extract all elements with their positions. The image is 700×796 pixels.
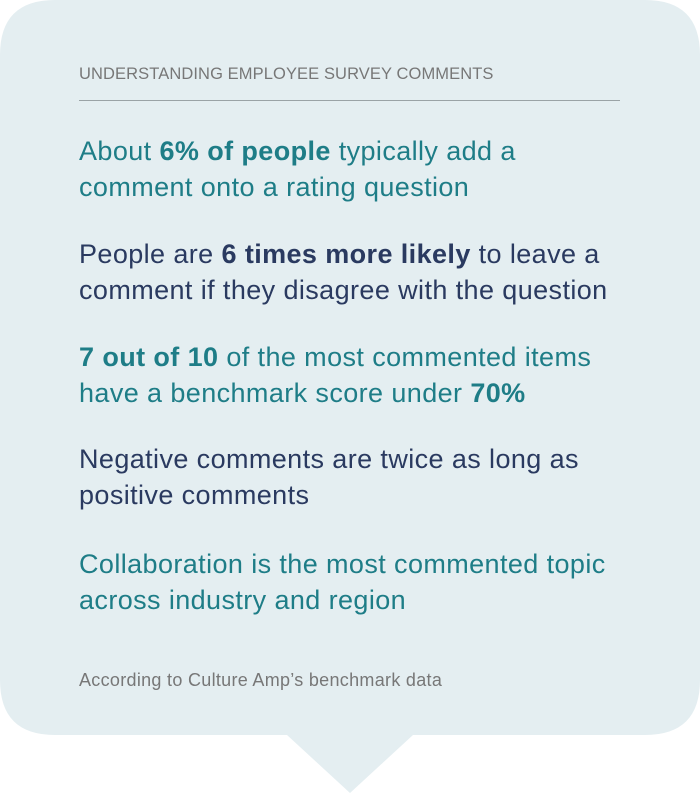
stat 4: positive comments [79, 480, 309, 510]
stat 2: People are 6 times more likely to leave a [79, 239, 600, 269]
stat 2 [79, 239, 608, 305]
stat 3: 7 out of 10 of the most commented items [79, 342, 591, 372]
stat 3: have a benchmark score under 70% [79, 378, 526, 408]
stat 2: comment if they disagree with the question [79, 275, 608, 305]
footer source: According to Culture Amp’s benchmark data [79, 670, 442, 690]
stat 1: comment onto a rating question [79, 172, 469, 202]
stat 4: Negative comments are twice as long as [79, 444, 579, 474]
stat 4 [79, 444, 579, 510]
stat 3 [79, 342, 591, 408]
stat 1: About 6% of people typically add a [79, 136, 516, 166]
heading: UNDERSTANDING EMPLOYEE SURVEY COMMENTS [79, 65, 494, 83]
stat 5: Collaboration is the most commented topic [79, 549, 606, 579]
stat 1 [79, 136, 516, 202]
stat 5: across industry and region [79, 585, 406, 615]
stat 5 [79, 549, 606, 615]
